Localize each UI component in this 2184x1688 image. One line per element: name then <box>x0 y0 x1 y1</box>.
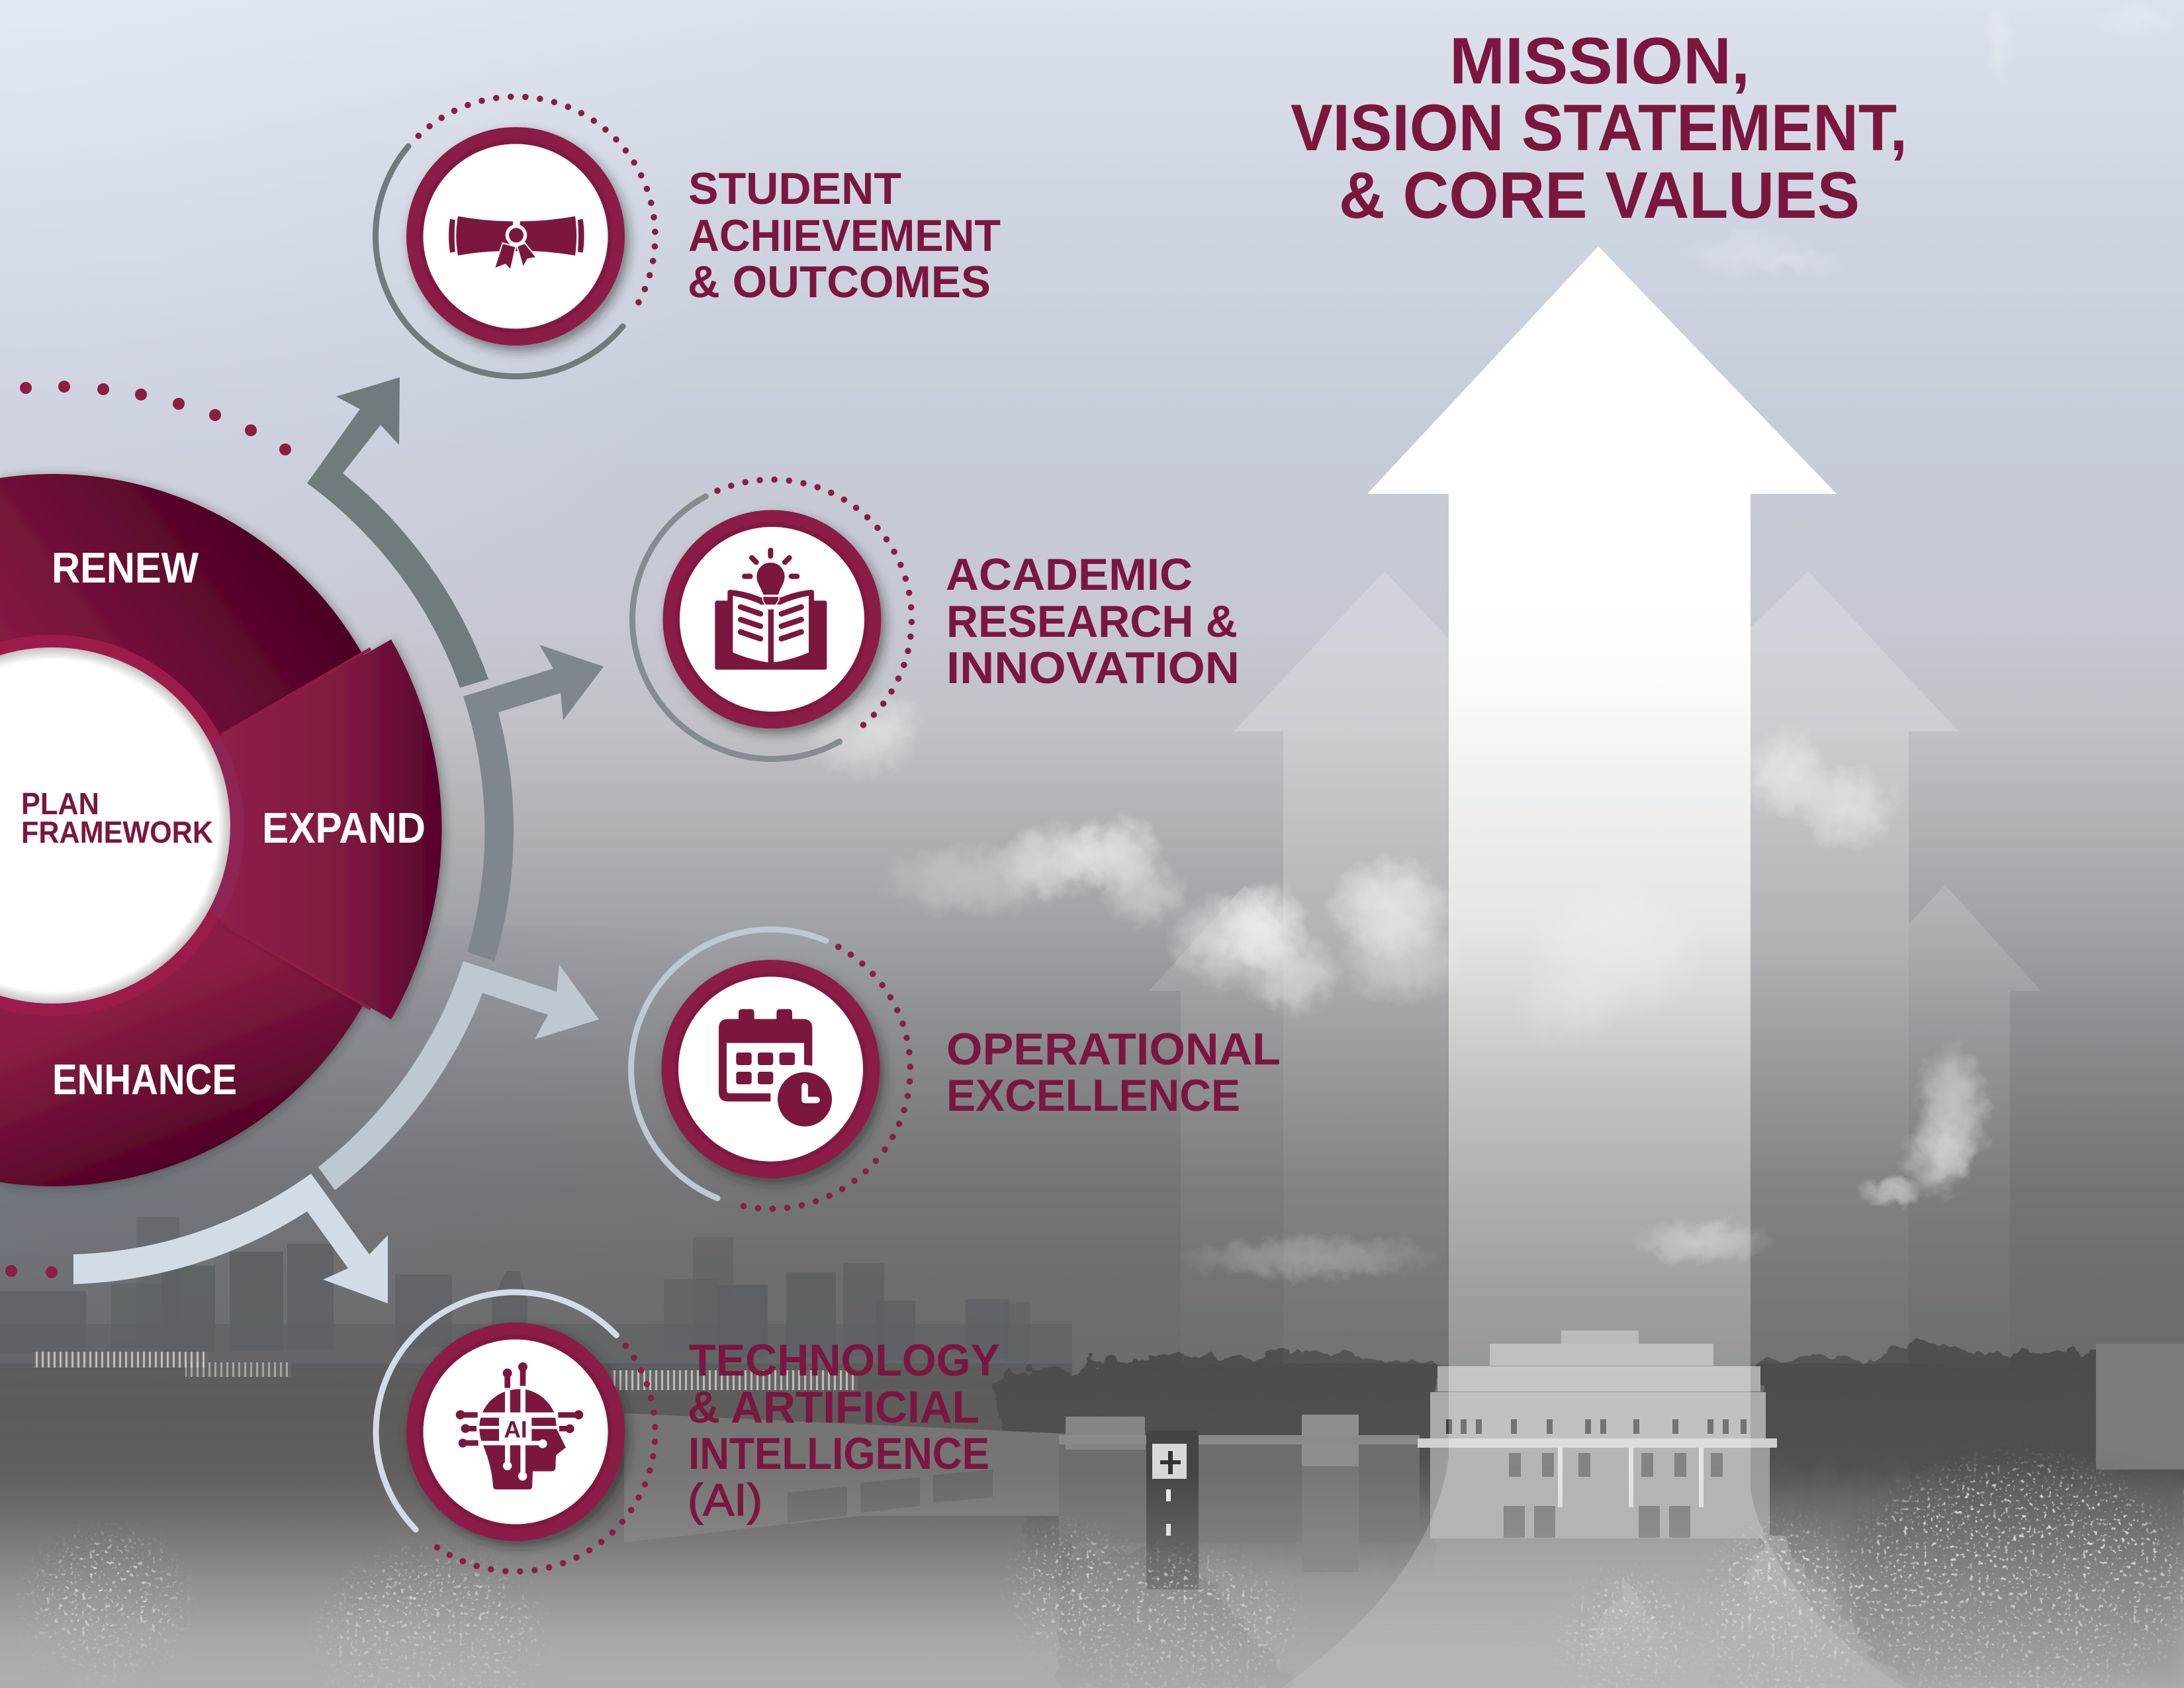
dotted arc bottom <box>5 1265 58 1278</box>
label: plan framework: PLAN <box>21 786 99 821</box>
heading text <box>946 549 1240 693</box>
heading text: & OUTCOMES <box>688 257 991 307</box>
outer grey arc <box>375 146 623 377</box>
badge circle <box>663 510 882 728</box>
panel: student achievement and outcomes <box>375 97 1001 377</box>
heading text <box>688 164 1001 307</box>
segment separator lower <box>220 922 371 1009</box>
heading text: EXCELLENCE <box>946 1070 1240 1121</box>
heading text <box>946 1024 1281 1121</box>
arrow and arc: student achievement <box>307 377 488 688</box>
dotted arc <box>730 947 910 1209</box>
heading text: RESEARCH & <box>946 596 1238 647</box>
lower left dark ground <box>0 1364 1072 1635</box>
expand ring part <box>210 736 244 920</box>
badge circle <box>662 960 880 1178</box>
icon: diploma scroll <box>449 216 584 269</box>
arrow and arc: operational excellence <box>318 961 599 1190</box>
clouds <box>801 0 2184 1282</box>
outer light arc <box>376 1292 616 1530</box>
bottom fade <box>0 1470 2184 1688</box>
heading text: OPERATIONAL <box>946 1024 1281 1074</box>
icon: AI head: AI <box>504 1417 527 1442</box>
main white arrow <box>1281 246 1906 1688</box>
label: plan framework: FRAMEWORK <box>21 815 213 849</box>
plan framework wheel <box>0 474 441 1186</box>
label: plan framework <box>21 786 213 849</box>
segment: renew <box>0 474 409 830</box>
dotted arc <box>717 480 911 733</box>
faded arrow left <box>1234 571 1449 1364</box>
arrow and arc: academic research <box>463 645 604 961</box>
faded arrow far left <box>1149 885 1283 1364</box>
badge circle <box>406 127 625 346</box>
heading text: INNOVATION <box>946 643 1240 693</box>
title <box>1291 24 1907 232</box>
dotted arc <box>418 97 655 314</box>
segment separator upper <box>222 649 371 735</box>
panel: academic research and innovation <box>632 480 1240 759</box>
distant city skyline <box>0 1217 1072 1370</box>
heading text: (AI) <box>688 1475 762 1525</box>
heading text: ACHIEVEMENT <box>688 211 1001 261</box>
heading text: & ARTIFICIAL <box>688 1382 979 1432</box>
segment: enhance <box>0 830 409 1186</box>
heading text: INTELLIGENCE <box>688 1429 989 1479</box>
clock tower <box>1146 1430 1199 1589</box>
dotted arc <box>426 1346 655 1571</box>
centre white circle <box>0 647 230 1004</box>
main campus auditorium building <box>1418 1331 1777 1538</box>
heading text: ACADEMIC <box>946 549 1193 600</box>
title: & CORE VALUES <box>1339 158 1860 232</box>
outer light arc <box>631 929 826 1198</box>
icon: calendar with clock <box>719 1009 832 1127</box>
icon: AI head <box>456 1362 583 1489</box>
faded arrow right <box>1751 571 1959 1364</box>
label: enhance: ENHANCE <box>52 1055 237 1103</box>
title: VISION STATEMENT, <box>1291 91 1907 164</box>
outer grey arc <box>632 496 839 759</box>
faded arrow far right <box>1909 885 2041 1364</box>
label: expand: EXPAND <box>262 804 426 852</box>
dotted arc top <box>20 381 291 455</box>
icon: open book with light bulb <box>715 550 827 670</box>
panel: technology and artificial intelligence <box>376 1292 1000 1571</box>
right campus building <box>2096 1344 2184 1470</box>
foreground trees <box>1059 1529 1906 1688</box>
heading text: TECHNOLOGY <box>689 1335 1000 1385</box>
striped low buildings <box>32 1352 858 1390</box>
badge circle <box>406 1323 625 1541</box>
dark right foreground trees <box>1840 1472 2184 1688</box>
left campus buildings <box>624 1413 1420 1572</box>
segment: expand <box>220 639 441 1019</box>
label: renew: RENEW <box>52 543 199 592</box>
heading text: STUDENT <box>688 164 901 214</box>
tree highlights <box>0 1443 2184 1688</box>
heading text <box>688 1335 1000 1525</box>
title: MISSION, <box>1449 24 1750 97</box>
centre ring <box>0 635 243 1016</box>
arrow and arc: technology <box>73 1174 388 1303</box>
panel: operational excellence <box>631 929 1281 1209</box>
tree line <box>993 1342 2184 1575</box>
